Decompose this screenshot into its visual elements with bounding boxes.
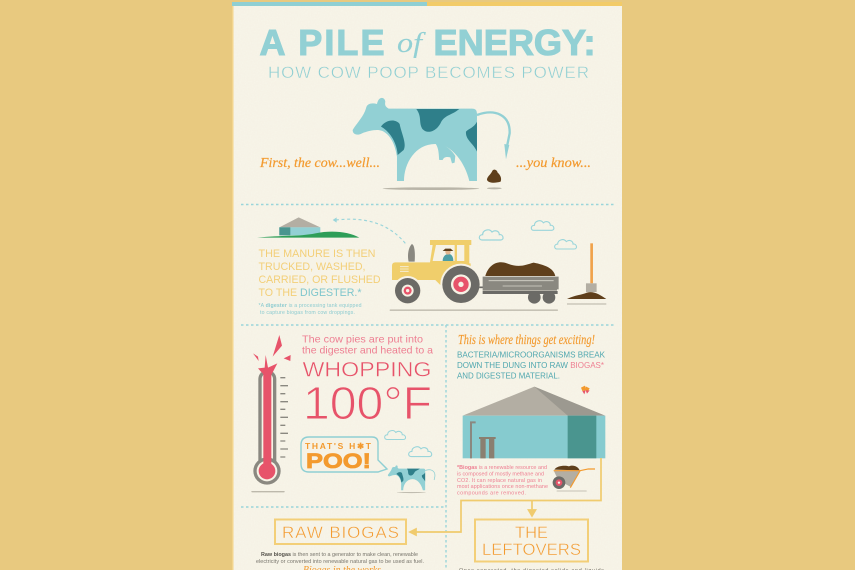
heating text: the digester and heated to a	[302, 346, 433, 356]
title	[260, 22, 596, 63]
butterfly	[581, 386, 590, 394]
illustration: small cow	[388, 465, 435, 493]
biogas footnote: *Biogas is a renewable resource and	[457, 465, 547, 471]
bacteria text: BACTERIA/MICROORGANISMS BREAK	[457, 350, 606, 360]
speech bubble: that's hot poo: POO!	[306, 450, 371, 473]
raw biogas body text: electricity or converted into renewable natural gas to be used as fuel.	[256, 559, 424, 565]
title: A PILE	[260, 22, 384, 63]
script heading: exciting: This is where things get exciting!	[458, 332, 595, 347]
clouds	[479, 221, 576, 249]
box: raw biogas: RAW BIOGAS	[282, 523, 399, 542]
biogas footnote: is composed of mostly methane and	[457, 472, 544, 478]
manure text: CARRIED, OR FLUSHED	[258, 274, 381, 286]
script caption right: ...you know...	[516, 156, 591, 171]
bacteria text: DOWN THE DUNG INTO RAW BIOGAS*	[457, 361, 605, 370]
digester footnote	[258, 303, 362, 316]
script caption left: First, the cow...well...	[259, 156, 380, 171]
box: the leftovers: LEFTOVERS	[482, 541, 581, 559]
illustration: digester tank	[463, 387, 605, 458]
raw biogas body text: Raw biogas is then sent to a generator to make clean, renewable	[261, 552, 418, 558]
poop	[487, 170, 502, 189]
clouds near small cow	[385, 431, 432, 457]
paper panel	[232, 2, 622, 570]
biogas footnote: most applications once non-methane	[457, 484, 548, 490]
manure text: TO THE DIGESTER.*	[258, 287, 362, 299]
digester footnote: *A digester is a processing tank equipped	[258, 303, 362, 309]
arrow: dashed arc to digester	[333, 217, 405, 243]
subtitle: HOW COW POOP BECOMES POWER	[268, 63, 589, 82]
biogas footnote: CO2. It can replace natural gas in	[457, 478, 542, 484]
title: of	[397, 27, 426, 59]
raw biogas body text	[256, 552, 424, 565]
illustration: tractor and trailer	[390, 240, 559, 311]
whopping label: WHOPPING	[302, 358, 432, 382]
biogas footnote: compounds are removed.	[457, 490, 526, 496]
heating text: The cow pies are put into	[302, 334, 423, 346]
biogas footnote	[457, 465, 548, 496]
title: ENERGY:	[434, 22, 596, 63]
illustration: large cow	[353, 98, 510, 190]
bacteria text: AND DIGESTED MATERIAL.	[457, 372, 560, 380]
illustration: wheelbarrow	[553, 466, 595, 491]
speech bubble: that's hot poo	[301, 437, 387, 473]
connector arrows	[410, 458, 601, 535]
top colour bar	[232, 2, 622, 6]
manure text: THE MANURE IS THEN	[258, 248, 376, 260]
speech bubble: that's hot poo: THAT'S H✱T	[305, 441, 372, 451]
illustration: shovel and dirt pile	[567, 243, 606, 305]
box: the leftovers: THE	[515, 524, 548, 542]
dashed dividers	[241, 204, 615, 570]
manure text	[258, 248, 381, 299]
manure text: TRUCKED, WASHED,	[258, 261, 366, 273]
illustration: thermometer	[251, 335, 291, 492]
digester footnote: to capture biogas from cow droppings.	[260, 310, 355, 316]
box: the leftovers	[475, 520, 588, 562]
bacteria text	[457, 350, 606, 380]
heating text	[302, 334, 433, 356]
illustration: small digester on hill	[257, 217, 359, 238]
box: raw biogas	[275, 520, 406, 544]
100°F figure: 100°F	[303, 377, 432, 429]
